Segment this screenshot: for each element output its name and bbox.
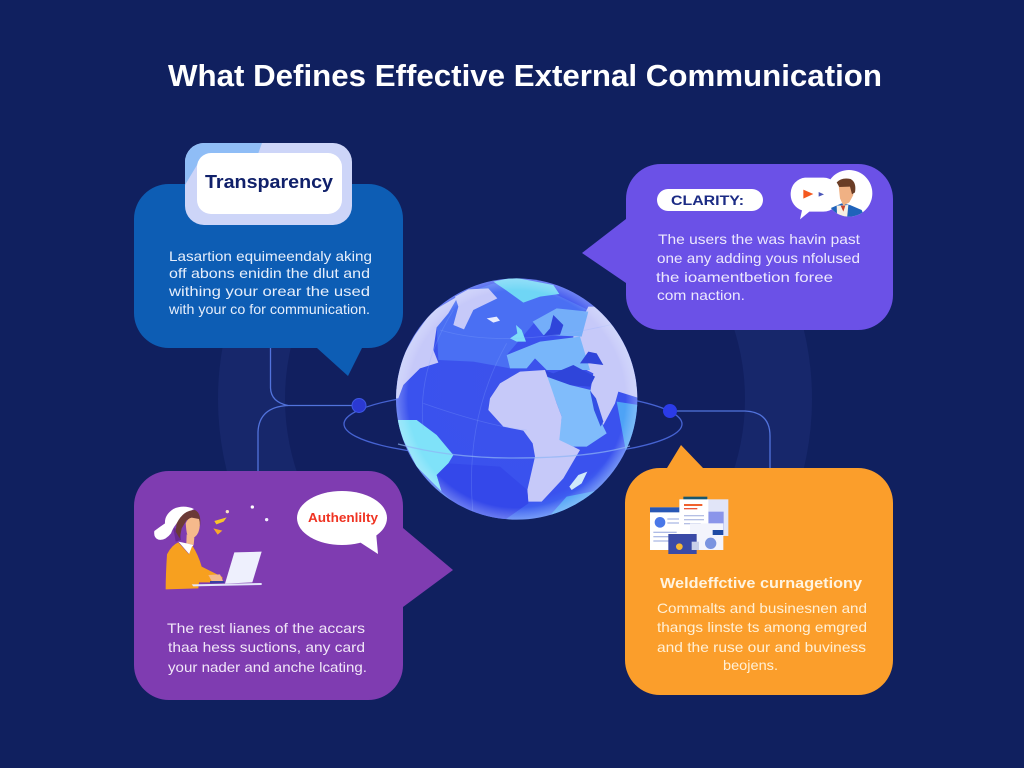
land: central europe (507, 337, 590, 370)
speech bubble shape (134, 471, 453, 700)
land: western coast (393, 296, 458, 398)
land: africa (488, 370, 580, 502)
island: iceland (487, 317, 500, 323)
right node (663, 404, 677, 418)
body text (656, 231, 860, 303)
body text (657, 600, 867, 673)
island: uk (510, 325, 526, 342)
icon: presenter with speech bubble (791, 170, 872, 222)
graticule (422, 310, 617, 517)
heading bubble: authenticity: Authenlilty (308, 510, 379, 525)
body text: beojens. (723, 657, 778, 673)
icon: documents (650, 497, 728, 554)
body text: with your co for communication. (168, 301, 370, 317)
speech bubble shape (625, 445, 893, 695)
land: northern europe (533, 308, 588, 337)
sea: baltic (543, 315, 563, 336)
left node (352, 398, 366, 412)
body text: com naction. (657, 287, 745, 303)
body text: Commalts and businesnen and (657, 600, 867, 616)
body text: The users the was havin past (658, 231, 860, 247)
infographic canvas (134, 64, 893, 700)
land: east africa (547, 377, 607, 447)
icon: person at laptop (154, 505, 268, 589)
body text: thangs linste ts among emgred (657, 619, 867, 635)
land: south atlantic shade (437, 463, 528, 523)
land: north america (453, 288, 497, 329)
island: madagascar (569, 472, 587, 490)
speech bubble shape (582, 164, 893, 330)
heading pill: clarity: CLARITY: (671, 193, 744, 208)
body text: and the ruse our and buviness (657, 639, 866, 655)
panel: web effective (625, 445, 893, 695)
heading pill: clarity (657, 189, 763, 211)
sea: red sea (590, 391, 603, 427)
sea: black sea (580, 352, 603, 365)
connector lines (258, 348, 770, 471)
heading bubble: authenticity (297, 491, 387, 554)
heading tag: transparency (185, 143, 352, 225)
body text (168, 248, 372, 317)
orbit ring (344, 390, 682, 458)
land: greenland (493, 277, 559, 303)
globe (393, 277, 643, 527)
body text: off abons enidin the dlut and (169, 265, 370, 281)
title: What Defines Effective External Communication (168, 58, 882, 93)
panel: clarity (582, 164, 893, 330)
body text: one any adding yous nfolused (657, 250, 860, 266)
body text: Lasartion equimeendaly aking (169, 248, 372, 264)
speech bubble shape (134, 184, 403, 376)
heading tag: transparency: Transparency (205, 172, 333, 192)
land: south america coast (397, 420, 453, 492)
panel: transparency (134, 143, 403, 376)
panel: authenticity (134, 471, 453, 700)
body text: your nader and anche lcating. (168, 659, 367, 675)
body text: withing your orear the used (168, 283, 370, 299)
body text: thaa hess suctions, any card (168, 639, 365, 655)
sea: mediterranean (544, 365, 595, 387)
land: asia (573, 307, 643, 425)
sea: indian ocean (550, 402, 638, 515)
subheading: Weldeffctive curnagetiony (660, 575, 863, 592)
body text (167, 620, 367, 675)
ocean: lighter north atlantic (437, 283, 588, 368)
body text: The rest lianes of the accars (167, 620, 365, 636)
body text: the ioamentbetion foree (656, 269, 833, 285)
orbit front arc (398, 444, 630, 458)
